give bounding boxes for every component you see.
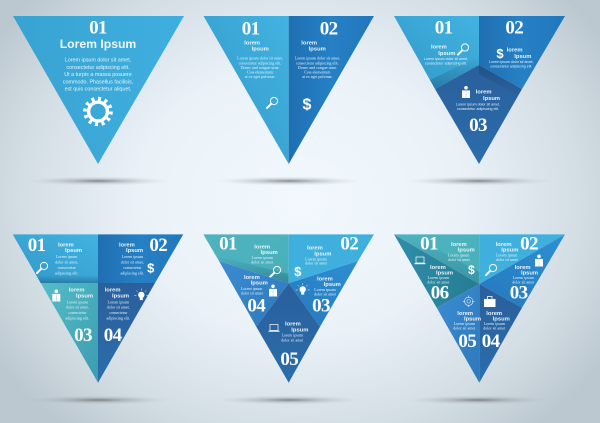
section 03: [479, 234, 565, 308]
section 01: Cras elementum: [247, 70, 274, 74]
icon: light bulb: [296, 283, 310, 295]
section 02: Donec and congue urna.: [298, 65, 337, 70]
section 04: adipiscing elit.: [107, 315, 130, 320]
section 01: 01: [242, 18, 260, 40]
section 02: Lorem ipsum: [122, 254, 144, 259]
section 02: Ipsum: [501, 247, 518, 253]
section 01: at ex eget pulvinar.: [245, 74, 275, 79]
icon: magnifier: [486, 264, 497, 275]
section 04: dolor sit amet,: [107, 305, 130, 311]
icon: dollar: $: [496, 46, 504, 61]
section 05: 05: [458, 331, 476, 352]
icon: light bulb: [134, 288, 148, 300]
icon: person: [52, 290, 60, 302]
section 02: lorem: [496, 242, 511, 248]
section 03: Lorem ipsum: [513, 275, 535, 280]
section 01: Lorem ipsum dolor sit amet,: [424, 57, 468, 61]
number 01: 01: [89, 18, 107, 38]
section 04: Lorem ipsum: [484, 321, 506, 326]
section 04: lorem: [486, 311, 502, 317]
section 02: dolor sit amet,: [121, 260, 144, 266]
section 06: 06: [431, 282, 449, 304]
section 04: lorem: [105, 288, 120, 294]
section 01: [394, 16, 479, 89]
section 01: dolor sit amet,: [55, 260, 78, 266]
section 01: adipiscing elit.: [55, 270, 78, 275]
section 01: consectetur adipiscing elit.: [239, 60, 281, 65]
section 02: Ipsum: [309, 46, 326, 52]
icon: dollar: $: [147, 261, 155, 276]
body text: consectetur adipiscing elit.: [66, 65, 130, 71]
icon: gear: [85, 99, 111, 124]
icon: magnifier: [267, 97, 278, 108]
section 03: lorem: [317, 276, 333, 282]
body text: Lorem ipsum dolor sit amet,: [65, 58, 132, 64]
section 01: 01: [435, 18, 453, 38]
section 02: lorem: [507, 48, 522, 54]
body text: est quis consectetur aliquet.: [65, 86, 131, 92]
panel: triangle three sections: [394, 16, 565, 164]
section 04: lorem: [244, 275, 260, 281]
section 02: Lorem ipsum dolor sit amet,: [489, 60, 533, 64]
section 01: 01: [420, 234, 438, 254]
section 03: lorem: [476, 90, 491, 96]
icon: dollar: $: [303, 96, 312, 114]
icon: laptop: [414, 257, 426, 264]
section 02: lorem: [301, 40, 317, 46]
section 02: 02: [320, 18, 338, 40]
section 02: 02: [149, 235, 167, 256]
section 02: Ipsum: [126, 248, 143, 254]
section 01: lorem: [58, 242, 74, 248]
section 04: [98, 283, 155, 383]
section 01: lorem: [244, 40, 260, 46]
section 03: Lorem ipsum dolor sit amet,: [456, 102, 500, 106]
section 02: adipiscing elit.: [121, 270, 144, 275]
section 01: [204, 16, 289, 164]
section 02: 02: [520, 234, 538, 254]
section 06: lorem: [430, 265, 446, 271]
section 03: adipiscing elit.: [66, 315, 89, 320]
section 03: Ipsum: [521, 270, 538, 276]
body text: commodo. Phasellus facilisis,: [63, 79, 134, 85]
section 03: Lorem ipsum: [314, 287, 337, 292]
section 04: Lorem ipsum: [241, 286, 263, 291]
section 03: dolor sit amet: [314, 292, 337, 297]
section 01: Ipsum: [438, 51, 455, 57]
section 01: consectetur: [58, 265, 76, 270]
section 02: at ex eget pulvinar.: [302, 74, 333, 79]
section 06: Lorem ipsum: [428, 275, 450, 280]
section 02: Ipsum: [314, 251, 331, 257]
section 02: Lorem ipsum: [305, 256, 328, 261]
section 03: [289, 261, 358, 327]
section 01: Donec and congue urna.: [241, 65, 279, 70]
section 05: dolor sit amet: [281, 337, 304, 342]
body text: Ut a turpis a massa posuere: [64, 72, 132, 78]
section 02: consectetur adipiscing elit.: [490, 64, 532, 68]
section 03: consectetur adipiscing elit.: [457, 107, 499, 111]
floor shadows: [26, 176, 551, 404]
section 05: dolor sit amet: [453, 326, 476, 331]
icon: briefcase: [484, 296, 496, 307]
section 02: 02: [505, 18, 523, 38]
section 03: Ipsum: [324, 282, 341, 288]
section 01: Lorem ipsum dolor sit amet,: [237, 56, 283, 62]
section 02: Lorem ipsum dolor sit amet,: [295, 56, 340, 62]
icon: magnifier: [458, 44, 469, 54]
section 02: [479, 234, 565, 284]
section 01: Ipsum: [261, 250, 278, 256]
section 02: dolor sit amet: [496, 257, 519, 262]
section 04: dolor sit amet: [241, 290, 264, 296]
icon: magnifier: [37, 262, 48, 273]
section 02: lorem: [119, 242, 135, 248]
icon: target: [463, 296, 474, 307]
section 01: dolor sit amet: [251, 260, 274, 265]
section 03: dolor sit amet,: [66, 305, 89, 311]
section 03: [41, 283, 98, 383]
icon: person: [269, 284, 277, 296]
section 03: 03: [74, 325, 92, 346]
icon: dollar: $: [294, 264, 302, 279]
section 03: 03: [510, 282, 528, 304]
section 03: Ipsum: [76, 294, 93, 300]
section 05: Lorem ipsum: [282, 333, 304, 338]
section 01: lorem: [431, 45, 447, 51]
section 01: lorem: [451, 242, 467, 248]
icon: magnifier: [270, 266, 281, 277]
panel: triangle one section: [13, 16, 184, 164]
section 01: Lorem ipsum: [448, 252, 470, 257]
section 01: Ipsum: [65, 248, 82, 254]
section 05: [437, 284, 481, 383]
section 03: consectetur: [68, 310, 87, 315]
section 01: dolor sit amet: [448, 257, 471, 262]
heading: Lorem Ipsum: [60, 37, 136, 51]
section 02: [98, 234, 183, 283]
section 01: 01: [28, 235, 46, 256]
section 02: Ipsum: [514, 54, 531, 60]
panel: triangle six sections: [394, 234, 565, 383]
section 01: Lorem ipsum: [252, 255, 274, 260]
section 04: dolor sit amet: [483, 326, 506, 331]
section 03: Ipsum: [483, 96, 500, 102]
body text: [63, 58, 134, 92]
section 01: Lorem ipsum: [56, 254, 78, 259]
section 02: [479, 16, 565, 89]
section 02: [289, 16, 374, 164]
section 02: 02: [340, 234, 358, 254]
section 03: dolor sit amet: [512, 280, 535, 285]
section 04: consectetur: [109, 310, 128, 315]
section 01: Ipsum: [252, 46, 269, 52]
section 03: lorem: [515, 265, 530, 271]
section 04: [219, 261, 289, 327]
section 06: dolor sit amet: [427, 280, 450, 285]
icon: laptop: [268, 324, 280, 331]
section 05: [256, 283, 320, 383]
section 03: lorem: [69, 288, 84, 294]
section 02: Lorem ipsum: [496, 252, 518, 257]
section 04: 04: [482, 331, 501, 352]
section 05: Ipsum: [291, 327, 308, 333]
section 04: Ipsum: [493, 316, 510, 322]
section 02: lorem: [307, 246, 323, 252]
section 01: [203, 234, 289, 283]
section 06: [394, 234, 479, 308]
icon: person: [535, 254, 543, 266]
section 04: Lorem ipsum: [108, 299, 130, 304]
section 02: [289, 234, 374, 283]
section 02: Cras elementum: [304, 70, 331, 74]
section 03: [435, 65, 522, 164]
section 02: consectetur adipiscing elit.: [296, 60, 339, 65]
section 03: 03: [469, 115, 487, 136]
section 01: Ipsum: [458, 247, 475, 253]
section 04: 04: [104, 325, 123, 346]
panel: triangle two sections: [204, 16, 374, 164]
section 01: 01: [219, 234, 237, 254]
panel: triangle five sections: [203, 234, 374, 383]
section 06: Ipsum: [436, 270, 453, 276]
section 02: consectetur: [123, 265, 142, 270]
section 02: dolor sit amet: [305, 261, 328, 266]
section 05: lorem: [285, 322, 301, 328]
section 05: lorem: [457, 311, 473, 317]
section 04: Ipsum: [251, 281, 268, 287]
section 05: Ipsum: [464, 316, 481, 322]
section 05: Lorem ipsum: [454, 321, 476, 326]
section 05: 05: [280, 349, 298, 370]
section 01: [13, 234, 98, 283]
section 01: consectetur adipiscing elit.: [425, 62, 467, 66]
section 01: lorem: [254, 244, 270, 250]
section 04: Ipsum: [112, 294, 129, 300]
icon: dollar: $: [468, 263, 475, 277]
section 03: Lorem ipsum: [67, 299, 89, 304]
section 01: [394, 234, 479, 284]
section 04: [479, 284, 522, 383]
icon: person: [462, 86, 470, 98]
section 04: 04: [247, 296, 266, 316]
panel: triangle four sections: [13, 234, 183, 383]
section 03: 03: [312, 296, 330, 316]
